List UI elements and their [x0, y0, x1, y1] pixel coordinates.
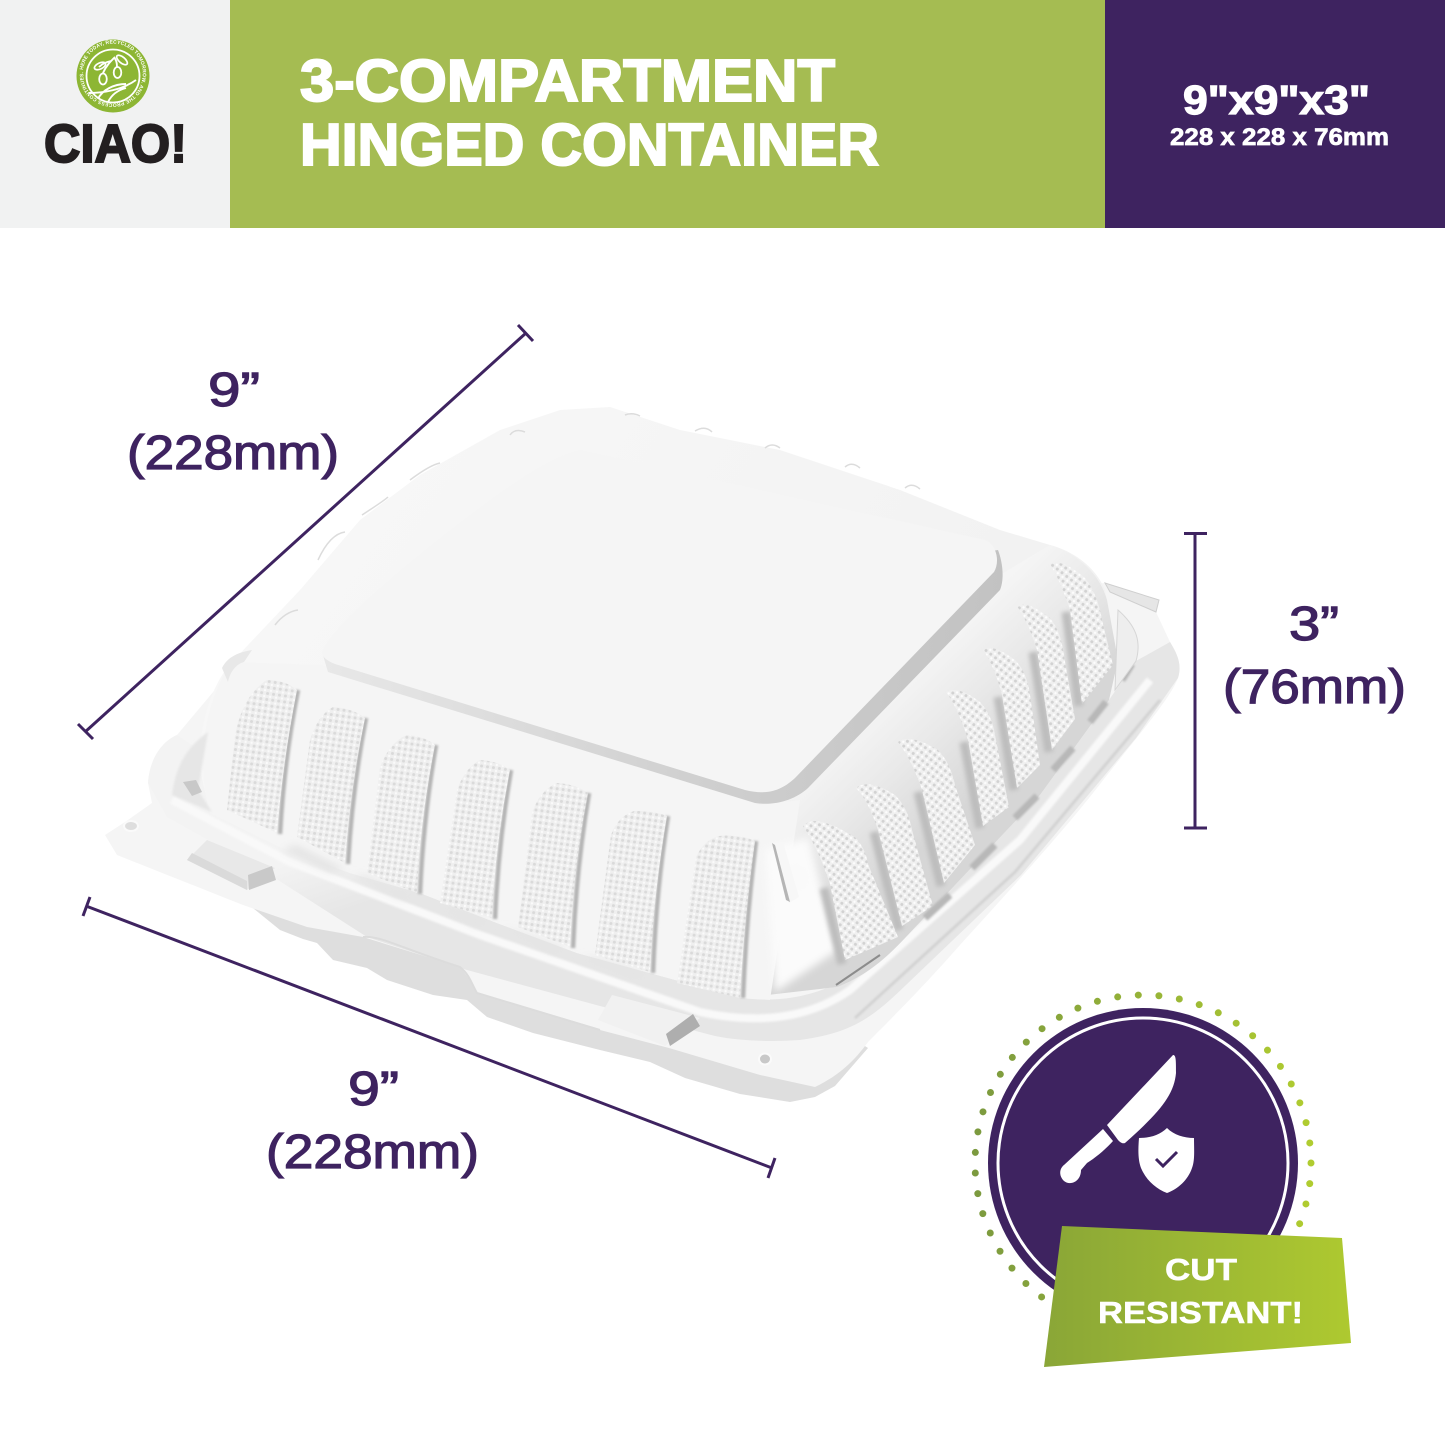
dimension: back width line: [78, 325, 533, 739]
dotted ring: [975, 995, 1311, 1331]
right side wall: [742, 545, 1118, 998]
front lip step: [363, 937, 600, 1030]
icon: recycling olive seal: HERE TODAY, RECYCLED TOMORROW. AND THE PROCESS CONTINUES.: [80, 40, 146, 107]
left corner curl: [172, 650, 252, 812]
dimension label: height: [1223, 598, 1406, 714]
flange hole left: [124, 821, 138, 831]
raised lid plateau edge: [322, 550, 1003, 804]
logo panel: [0, 0, 230, 228]
front closing knob: [772, 842, 809, 903]
front wall: [203, 662, 800, 1000]
white inner ring: [998, 1018, 1288, 1308]
title line 2: HINGED CONTAINER: [300, 112, 879, 178]
purple disc: [988, 1008, 1298, 1318]
front ribs: [227, 680, 755, 998]
lid scallop edge marks: [275, 414, 920, 625]
product: white hinged container: [105, 407, 1180, 1102]
dimension label: back width: [127, 364, 339, 480]
title line 1: 3-COMPARTMENT: [300, 48, 835, 114]
size in millimetres: 228 x 228 x 76mm: [1170, 124, 1389, 151]
lid body: [200, 407, 1118, 998]
flange hole right: [759, 1054, 771, 1064]
header banner: [0, 0, 1445, 228]
raised lid plateau: [322, 450, 997, 792]
size in inches: 9"x9"x3": [1183, 77, 1370, 123]
front rib soft shading: [282, 845, 650, 978]
rim band: [148, 642, 1180, 1041]
ribbon: [1044, 1226, 1351, 1367]
dimension label: height: (76mm): [1223, 661, 1406, 714]
ribbon text line 1: CUT: [1165, 1252, 1237, 1287]
ribbon text line 2: RESISTANT!: [1098, 1295, 1303, 1330]
size panel: [1105, 0, 1445, 228]
wall shadow crack: [836, 955, 880, 985]
badge: cut resistant: [975, 995, 1351, 1367]
dimension label: back width: 9”: [208, 364, 260, 417]
rim slots: [925, 664, 1132, 918]
latch tab left: [187, 840, 276, 890]
logo wordmark: CIAO!: [44, 114, 187, 174]
dimension: height line: [1184, 533, 1207, 828]
wall corner gloss: [765, 838, 838, 992]
right ribs: [803, 563, 1113, 960]
flange: [105, 583, 1180, 1087]
dimension label: height: 3”: [1289, 598, 1339, 651]
front rib shadows: [280, 690, 756, 998]
rim highlight: [172, 680, 1150, 1018]
dimension: front width line: [83, 897, 775, 1178]
dimension label: front width: 9”: [348, 1063, 399, 1116]
title panel: [230, 0, 1105, 228]
dimension label: back width: (228mm): [127, 427, 339, 480]
right rib shadows: [824, 612, 1079, 964]
icon: shield with check: [1138, 1128, 1194, 1193]
right hinge detail: [1105, 583, 1159, 612]
right corner pocket: [1115, 610, 1138, 690]
tray skirt: [243, 880, 868, 1102]
icon: knife: [1060, 1055, 1176, 1183]
dimension label: front width: [266, 1063, 479, 1179]
rim groove: [855, 700, 1160, 1018]
dimension label: front width: (228mm): [266, 1126, 479, 1179]
latch tab right: [598, 995, 700, 1046]
